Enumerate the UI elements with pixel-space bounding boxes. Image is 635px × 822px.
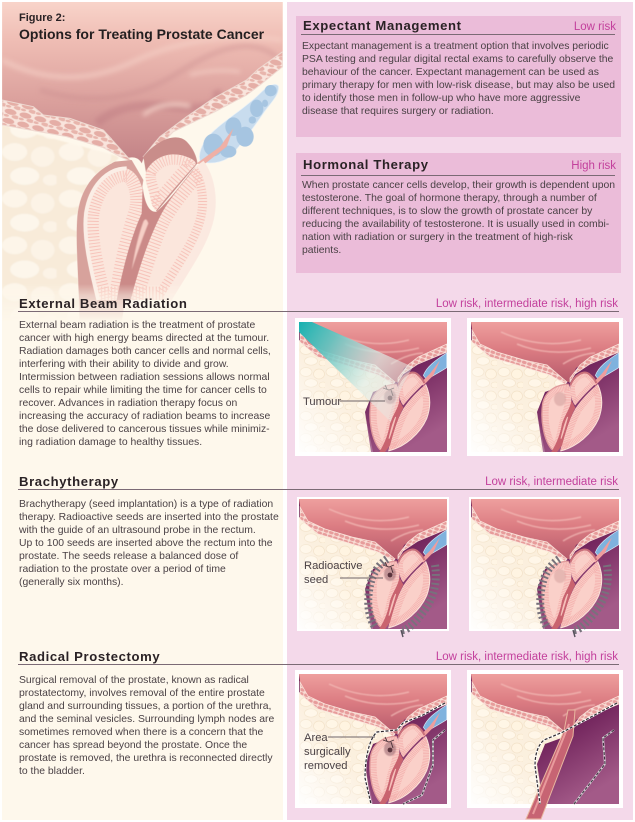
text block: to identify those men in follow-up who have more aggressive [302, 93, 580, 104]
illustration: area surgically removed [295, 670, 451, 808]
left bladder wall [2, 100, 132, 162]
panel: expectant management [296, 16, 621, 137]
prostate large right lobe [128, 163, 211, 300]
text block: testosterone. The goal of hormone therapy, through a number of [302, 193, 597, 204]
right pink column [287, 2, 633, 820]
text block: external beam [19, 320, 271, 448]
hero anatomical illustration [2, 2, 283, 317]
seeds [368, 559, 436, 630]
text block: radical prostectomy: gland and surrounding tissues, a portion of the urethra, [19, 701, 271, 712]
text block: Expectant management is a treatment option that involves periodic [302, 41, 609, 52]
illustration: beam with tumour [295, 318, 451, 456]
risk label: external beam: Low risk, intermediate risk, high risk [436, 298, 618, 310]
illustration: seeds with tumour [297, 497, 449, 638]
text block: radical prostectomy: and the seminal vesicles. Surrounding lymph nodes are [19, 714, 274, 725]
text block: external beam: Intermission between radiation sessions allows normal [19, 372, 270, 383]
illustration: after beam [467, 318, 623, 456]
text block: nation with radiation or surgery in the treatment of high-risk [302, 232, 573, 243]
prostate outer wall [77, 160, 143, 333]
risk label: Low risk [574, 21, 616, 33]
prostate left lobe [85, 168, 144, 300]
text block: radical prostectomy: sometimes removed when there is a concern that the [19, 727, 263, 738]
label: tumour: Tumour [303, 396, 341, 408]
text block: brachytherapy: with the guide of an ultrasound probe in the rectum. [19, 525, 256, 536]
text block: radical prostectomy: cancer has spread beyond the prostate. Once the [19, 740, 247, 751]
illustration: seeds after treatment [469, 497, 621, 638]
seeds [540, 559, 608, 630]
urethra [117, 165, 197, 300]
text block: different techniques, is to slow the growth of prostate cancer by [302, 206, 592, 217]
right bladder wall [143, 52, 283, 159]
heading: Hormonal Therapy [303, 157, 429, 172]
prostate upper lobe [143, 137, 197, 212]
text block [302, 180, 615, 256]
text block: brachytherapy: therapy. Radioactive seeds are inserted into the prostate [19, 512, 279, 523]
illustration: after surgery [467, 670, 623, 820]
text block: radical prostectomy: prostate is removed, the urethra is reconnected directly [19, 753, 273, 764]
text block: brachytherapy: prostate. The seeds release a balanced dose of [19, 551, 238, 562]
label: radioactive seed: Radioactive [304, 560, 362, 572]
text block: reducing the availability of testosterone. It is usually used in combi- [302, 219, 609, 230]
text block: brachytherapy: Brachytherapy (seed implantation) is a type of radiation [19, 499, 273, 510]
risk label: brachytherapy: Low risk, intermediate risk [485, 476, 618, 488]
label: area surgically removed: removed [304, 760, 348, 772]
text block: primary therapy for men with low-risk disease, but may also be used [302, 80, 615, 91]
seminal vesicle [197, 84, 279, 165]
text block: brachytherapy: radiation to the prostate over a period of time [19, 564, 226, 575]
text block: external beam: recover. Advances in radiation therapy focus on [19, 398, 237, 409]
text block: external beam: the dose delivered to cancerous tissues while minimiz- [19, 424, 270, 435]
text block: patients. [302, 245, 341, 256]
text block: radical prostectomy: to the bladder. [19, 766, 85, 777]
bladder [2, 2, 283, 163]
heading: external beam radiation: External Beam Radiation [19, 296, 188, 311]
figure label: Figure 2: [19, 12, 65, 24]
text block: external beam: interfering with their ability to divide and grow. [19, 359, 229, 370]
risk label: High risk [571, 160, 616, 172]
text block: brachytherapy: Up to 100 seeds are inserted above the rectum into the [19, 538, 273, 549]
text block: external beam: Radiation damages both cancer cells and normal cells, [19, 346, 271, 357]
text block: external beam: cells to repair while limiting the time for cancer cells to [19, 385, 267, 396]
catheter urethra [526, 710, 575, 819]
text block: external beam: External beam radiation is the treatment of prostate [19, 320, 255, 331]
text block: radical prostectomy [19, 675, 274, 777]
risk label: radical prostectomy: Low risk, intermediate risk, high risk [436, 651, 618, 663]
heading: Expectant Management [303, 18, 462, 33]
fat tissue [2, 126, 118, 300]
text block: behaviour of the cancer. Expectant management can be used as [302, 67, 599, 78]
heading: brachytherapy: Brachytherapy [19, 474, 119, 489]
text block [302, 41, 615, 117]
label: area surgically removed: surgically [304, 746, 351, 758]
text block: disease that requires surgery or radiation. [302, 106, 494, 117]
text block: PSA testing and regular digital rectal exams to carefully observe the [302, 54, 613, 65]
left cream column [2, 2, 283, 820]
label: radioactive seed: seed [304, 574, 328, 586]
heading: radical prostectomy: Radical Prostectomy [19, 649, 160, 664]
text block: external beam: ing radiation damage to healthy tissues. [19, 437, 202, 448]
text block: radical prostectomy: prostatectomy, involves removal of the entire prostate [19, 688, 265, 699]
text block: radical prostectomy: Surgical removal of the prostate, known as radical [19, 675, 249, 686]
text block: When prostate cancer cells develop, their growth is dependent upon [302, 180, 615, 191]
bladder folds [2, 38, 283, 123]
panel: hormonal therapy [296, 153, 621, 273]
text block: brachytherapy: (generally six months). [19, 577, 124, 588]
text block: external beam: increasing the accuracy of radiation beams to increase [19, 411, 270, 422]
title: Options for Treating Prostate Cancer [19, 26, 264, 42]
text block: brachytherapy [19, 499, 279, 588]
label: area surgically removed: Area [304, 732, 328, 744]
text block: external beam: cancer with high energy beams directed at the tumour. [19, 333, 269, 344]
